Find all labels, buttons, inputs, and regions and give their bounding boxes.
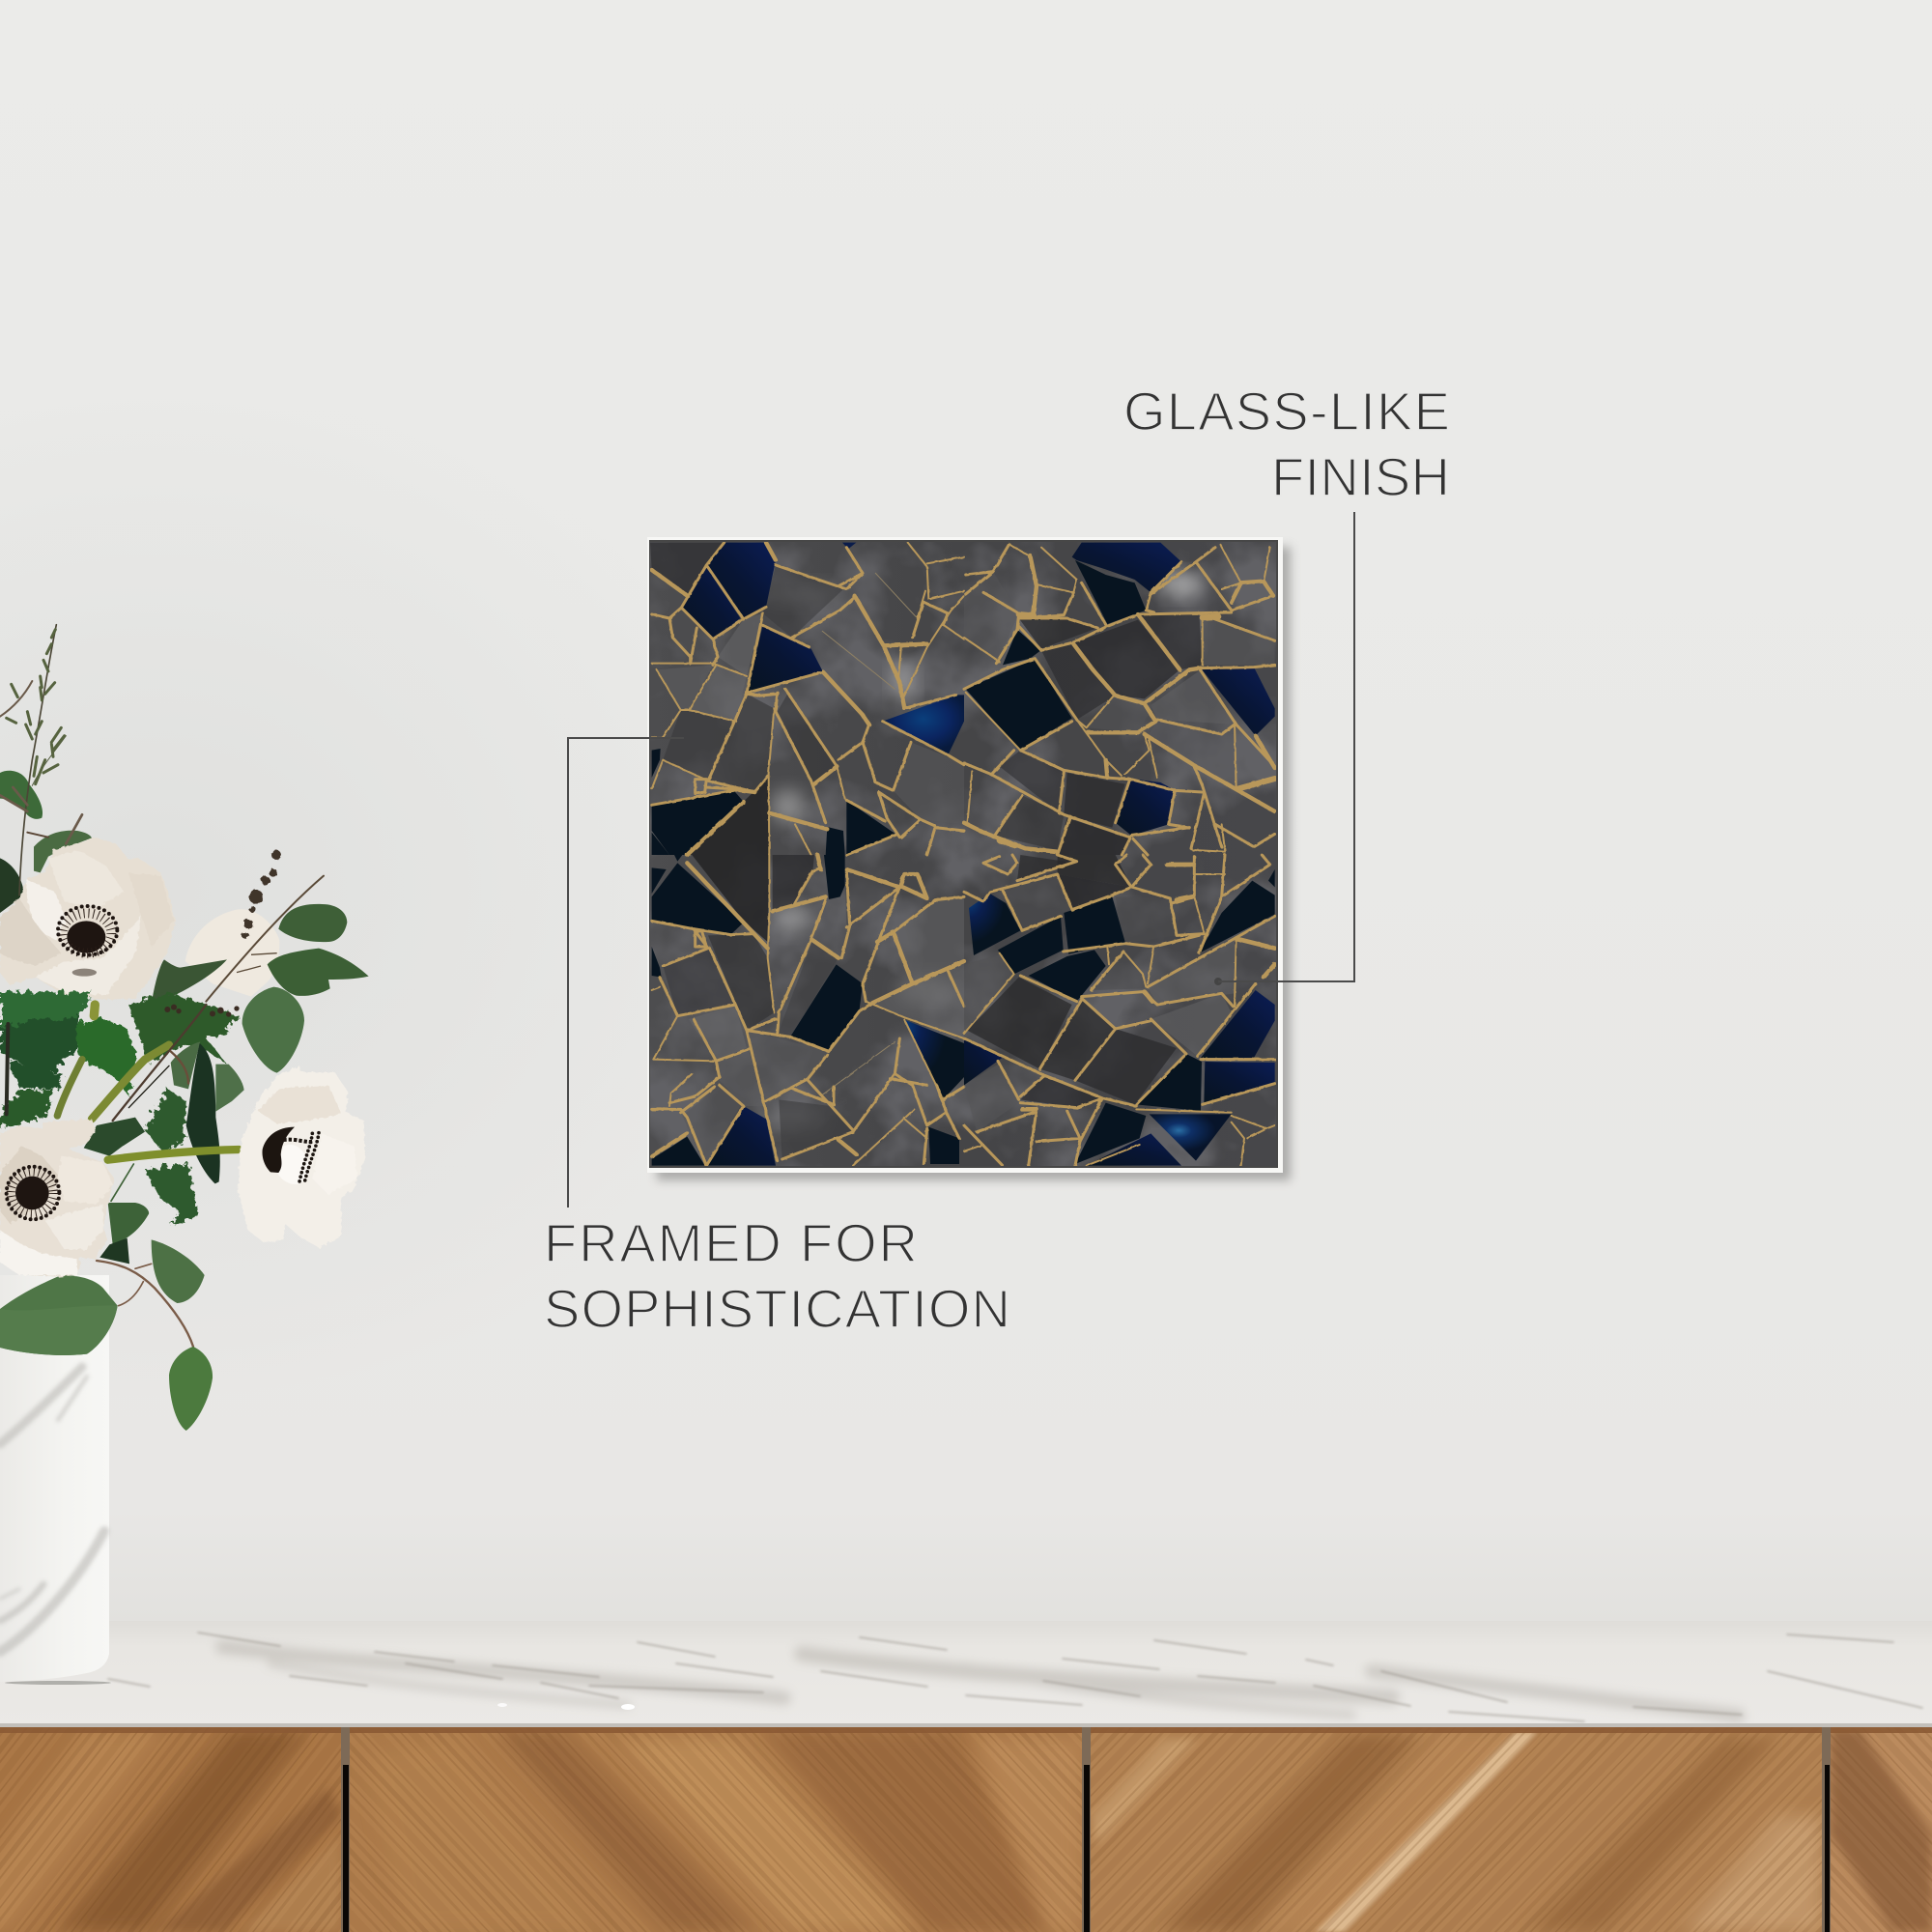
callout label (1123, 381, 1450, 507)
left sprig (0, 625, 82, 895)
fern foliage (0, 992, 240, 1225)
flower bouquet (0, 625, 369, 1431)
tile shading (650, 543, 964, 855)
navy shards (652, 543, 964, 855)
framed mosaic artwork (647, 537, 1291, 1180)
large bottom leaf (0, 1275, 118, 1355)
leader dot on canvas (1214, 978, 1222, 985)
hanging leaf (169, 1347, 213, 1431)
gold seams (652, 543, 964, 855)
callout label: GLASS-LIKE (1123, 381, 1450, 441)
marble vase (0, 1275, 111, 1685)
quadrant top-left tiles (650, 543, 964, 855)
lower bouquet (0, 987, 365, 1431)
callout label: FRAMED FOR (544, 1212, 918, 1273)
back leaves (0, 771, 92, 913)
marble countertop (0, 1621, 1932, 1727)
bud flower (185, 909, 279, 997)
quadrant bottom-left tiles (652, 855, 964, 1166)
mid leaves (84, 1041, 244, 1303)
tile shading (964, 572, 1275, 855)
door panel 4 (1831, 1727, 1932, 1932)
white frame (647, 537, 1283, 1173)
panel top bevel (0, 1727, 1932, 1733)
anemone flower, right (239, 1065, 365, 1248)
navy shards (964, 869, 1275, 1166)
callout: framed for sophistication (544, 738, 1010, 1339)
gold seams (964, 855, 1275, 1166)
gold seams (652, 855, 964, 1166)
seed buds (164, 1005, 240, 1017)
right drooping leaf (242, 987, 304, 1073)
callout label (544, 1212, 1010, 1339)
upper bouquet (0, 625, 369, 1005)
callout leader line (568, 738, 684, 1208)
gold seams (964, 544, 1275, 855)
quadrant bottom-right tiles (964, 855, 1275, 1166)
canvas border (649, 540, 1278, 1168)
fine marble veins (108, 1633, 1922, 1721)
anemone flower, lower left (0, 1119, 114, 1277)
tile shading (964, 855, 1235, 1132)
door panel 2 (350, 1727, 1082, 1932)
tile shading (663, 855, 964, 1164)
callout label: SOPHISTICATION (544, 1278, 1010, 1339)
callout: glass-like finish (1123, 381, 1450, 981)
panel gaps (343, 1765, 1830, 1932)
room scene (0, 392, 1932, 1932)
navy shards (966, 543, 1275, 836)
callout leader line (1218, 512, 1354, 981)
door panel 3 (1091, 1727, 1822, 1932)
branch and seed sprig (206, 850, 324, 1002)
dark branches (7, 1005, 206, 1347)
right leaves (152, 904, 369, 1005)
callout label: FINISH (1271, 446, 1450, 507)
broad marble veins (222, 1647, 1739, 1716)
quadrant top-right tiles (964, 543, 1275, 855)
mosaic canvas (650, 542, 1276, 1166)
navy shards (652, 855, 964, 1166)
anemone flower, upper left (0, 838, 176, 1000)
frame shadow (657, 547, 1291, 1180)
base grey tiles (650, 542, 1276, 1166)
wooden sideboard (0, 1727, 1932, 1932)
yellow-green stems (57, 1005, 239, 1160)
door panel 1 (0, 1727, 341, 1932)
